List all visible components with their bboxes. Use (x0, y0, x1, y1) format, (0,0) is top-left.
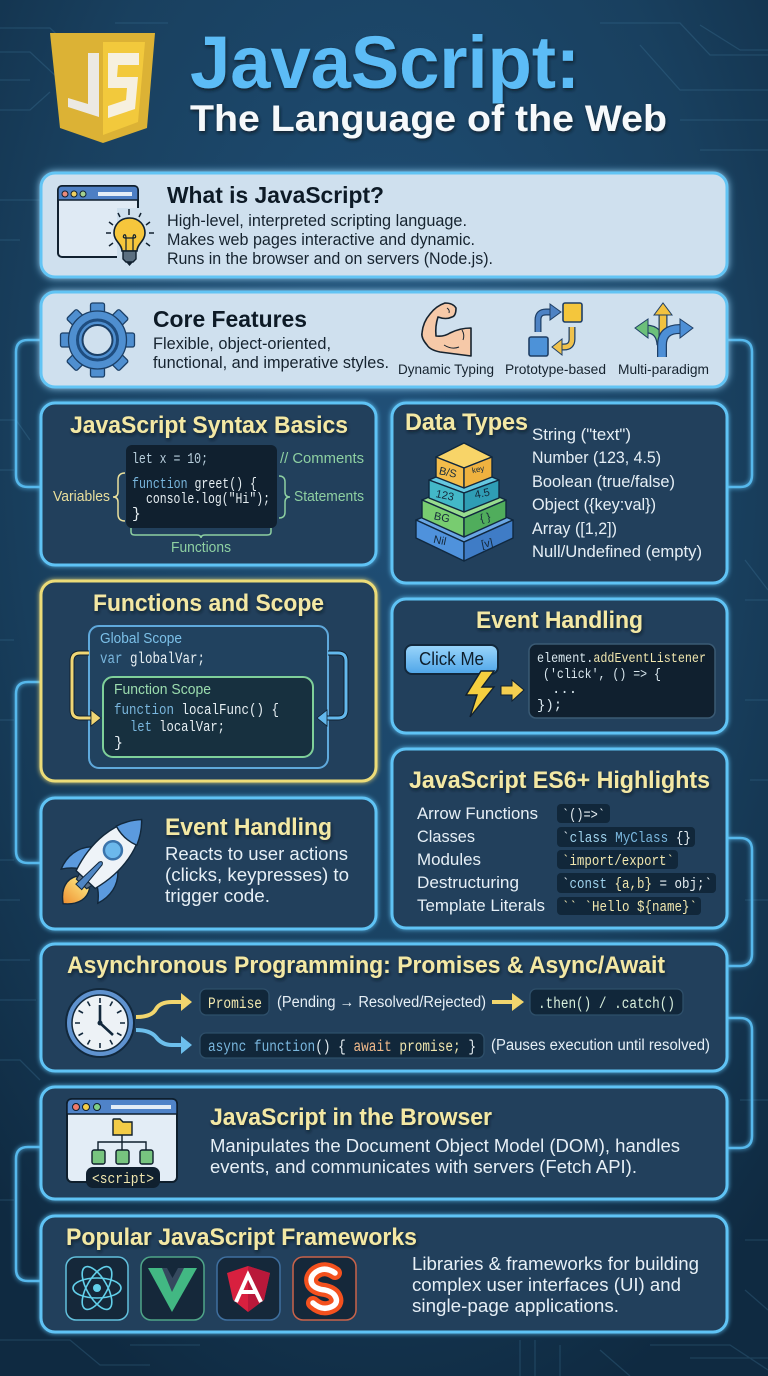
heading: Data Types (405, 409, 528, 436)
description: Makes web pages interactive and dynamic. (167, 231, 475, 249)
icon: data type stack (416, 443, 513, 561)
annotation: variables (53, 473, 125, 521)
arrow: to async function (136, 1030, 192, 1054)
arrow: to promise (136, 993, 192, 1017)
connectors (16, 340, 752, 1281)
arrow (501, 680, 524, 701)
panel: functions and scope (41, 581, 376, 781)
icon: prototype arrows (529, 303, 582, 356)
annotation: statements (279, 476, 364, 518)
button: click me: Click Me (419, 649, 484, 669)
then catch chip (530, 989, 683, 1015)
feature names: Template Literals (417, 897, 545, 915)
then catch chip: .then() / .catch() (538, 995, 675, 1013)
panel: what is JavaScript (41, 173, 727, 277)
icon: data type stack: Nil (432, 534, 447, 548)
icon: data type stack: [v] (480, 537, 494, 551)
feature names: Arrow Functions (417, 805, 538, 823)
panel: JavaScript in the browser (41, 1087, 727, 1199)
feature names: Destructuring (417, 874, 519, 892)
global scope box (89, 626, 328, 768)
title: The Language of the Web (190, 98, 667, 139)
icon: data type stack: key (471, 464, 485, 475)
heading: JavaScript Syntax Basics (70, 412, 348, 439)
feature labels: Multi-paradigm (618, 361, 709, 377)
heading: Functions and Scope (93, 590, 324, 617)
code chips: `()=>` (562, 808, 605, 824)
title: JavaScript: (190, 21, 580, 104)
async note: (Pauses execution until resolved) (491, 1037, 710, 1054)
icon: gear (60, 303, 134, 377)
description: Manipulates the Document Object Model (DOM), handles (210, 1135, 680, 1156)
feature labels (398, 361, 709, 377)
code block: } (132, 507, 141, 523)
panel: asynchronous programming (41, 944, 727, 1071)
icon: data type stack: { } (479, 511, 492, 525)
description: Runs in the browser and on servers (Node.js). (167, 250, 493, 268)
description (210, 1135, 680, 1177)
code block: element.addEventListener (537, 651, 706, 667)
function scope box: function localFunc() { (114, 702, 279, 719)
icon: clock (66, 989, 134, 1057)
icon: Vue (141, 1257, 204, 1320)
description (165, 843, 349, 906)
icon: data type stack: B/S (438, 465, 458, 481)
panel: core features (41, 292, 727, 387)
feature labels: Dynamic Typing (398, 361, 494, 377)
heading: Event Handling (165, 814, 332, 841)
icon: data type stack: 123 (435, 488, 455, 504)
icon: Svelte (293, 1257, 356, 1320)
description: (clicks, keypresses) to (165, 864, 349, 885)
icon: lightning bolt (466, 671, 494, 717)
icon: browser DOM tree: <script> (92, 1171, 154, 1188)
code chips: `` `Hello ${name}` (562, 900, 697, 916)
description: Reacts to user actions (165, 843, 348, 864)
function scope box: let localVar; (130, 719, 225, 736)
heading: JavaScript ES6+ Highlights (409, 767, 710, 794)
heading: Popular JavaScript Frameworks (66, 1224, 417, 1251)
description: complex user interfaces (UI) and (412, 1274, 681, 1295)
promise chip (200, 989, 269, 1015)
code block: }); (537, 698, 562, 714)
annotation: statements: Statements (294, 488, 364, 505)
code block: let x = 10; (132, 452, 208, 468)
description (412, 1253, 699, 1316)
code chips: `const {a,b} = obj;` (562, 877, 712, 893)
description: Flexible, object-oriented, (153, 335, 331, 353)
icon: rocket (43, 801, 162, 923)
data type list: Boolean (true/false) (532, 473, 675, 491)
description: High-level, interpreted scripting language. (167, 212, 467, 230)
panel: event handling summary (41, 798, 376, 929)
description: Libraries & frameworks for building (412, 1253, 699, 1274)
function scope box (103, 677, 313, 757)
panel: popular frameworks (41, 1216, 727, 1332)
global scope box: var globalVar; (100, 650, 205, 668)
icon: data type stack: BG (433, 510, 451, 526)
code block: ... (552, 682, 577, 698)
promise states: (Pending → Resolved/Rejected) (277, 994, 486, 1011)
promise chip: Promise (208, 995, 262, 1013)
code block (529, 644, 715, 718)
panel: data types (392, 403, 727, 583)
annotation: comments: // Comments (280, 450, 364, 467)
feature names (417, 805, 545, 915)
icon: data type stack: 4.5 (473, 487, 491, 501)
heading: Core Features (153, 306, 307, 332)
heading: Event Handling (476, 607, 643, 634)
annotation: variables: Variables (53, 488, 110, 505)
data type list: Array ([1,2]) (532, 520, 617, 538)
function scope box: } (114, 735, 123, 752)
panel: ES6 highlights (392, 749, 727, 928)
async function chip: async function() { await promise; } (208, 1038, 476, 1056)
code block: console.log("Hi"); (146, 492, 270, 508)
description (167, 212, 493, 268)
code chips: `class MyClass {} (562, 831, 691, 847)
code block: ('click', () => { (543, 667, 661, 683)
arrow: blue scope (317, 653, 346, 726)
code chips (557, 804, 716, 916)
function scope box: Function Scope (114, 682, 211, 698)
description (153, 335, 389, 372)
data type list (532, 426, 702, 561)
feature names: Classes (417, 828, 475, 846)
title (190, 21, 667, 139)
panel: syntax basics (41, 403, 376, 565)
feature names: Modules (417, 851, 481, 869)
code chips: `import/export` (562, 854, 674, 870)
code block (126, 445, 277, 528)
description: functional, and imperative styles. (153, 354, 389, 372)
button: click me (405, 645, 498, 674)
arrow: to then (492, 993, 524, 1011)
icon: muscle arm (422, 303, 471, 356)
data type list: String ("text") (532, 426, 631, 444)
heading: What is JavaScript? (167, 182, 384, 208)
annotation: functions: Functions (171, 539, 231, 556)
icon: React (66, 1257, 128, 1320)
global scope box: Global Scope (100, 631, 182, 647)
code block: function greet() { (132, 477, 257, 493)
panel: event handling code (392, 599, 727, 733)
data type list: Null/Undefined (empty) (532, 543, 702, 561)
data type list: Object ({key:val}) (532, 496, 656, 514)
icon: JS shield (50, 33, 155, 143)
icon: browser and lightbulb (58, 186, 154, 266)
arrow: yellow scope (72, 653, 101, 726)
feature labels: Prototype-based (505, 361, 606, 377)
data type list: Number (123, 4.5) (532, 449, 661, 467)
icon: three-way arrows (635, 303, 693, 357)
description: events, and communicates with servers (Fetch API). (210, 1156, 637, 1177)
description: trigger code. (165, 885, 270, 906)
icon: browser DOM tree (67, 1099, 177, 1188)
icon: Angular (217, 1257, 280, 1320)
async function chip (200, 1033, 484, 1058)
annotation: functions (131, 528, 271, 556)
description: single-page applications. (412, 1295, 619, 1316)
heading: JavaScript in the Browser (210, 1104, 492, 1131)
heading: Asynchronous Programming: Promises & Async/Await (67, 952, 665, 979)
